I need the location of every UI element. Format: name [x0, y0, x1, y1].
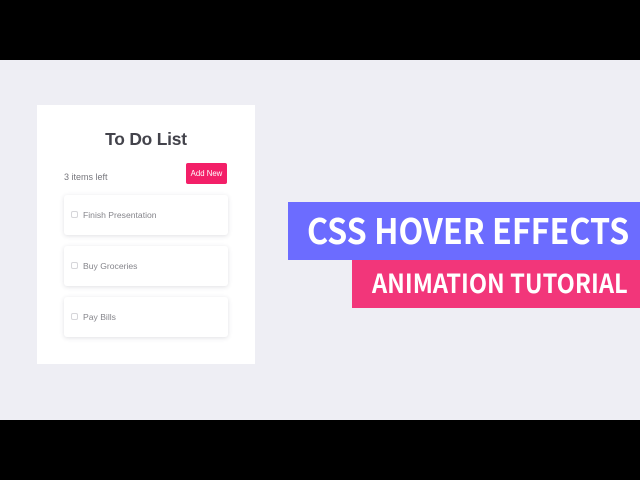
button: Add New: Add New [191, 169, 222, 178]
label: Pay Bills [83, 312, 116, 322]
label: Finish Presentation [83, 210, 157, 220]
banner: ANIMATION TUTORIAL [352, 260, 640, 308]
banner: CSS HOVER EFFECTS [288, 202, 640, 260]
text: items left: 3 items left [64, 172, 108, 182]
heading: To Do List: To Do List [105, 129, 187, 149]
panel: to do list card [37, 105, 255, 364]
banner subtitle text: ANIMATION TUTORIAL [372, 264, 628, 301]
label: Buy Groceries [83, 261, 137, 271]
list item: Finish Presentation [64, 195, 228, 235]
checkbox [71, 211, 78, 218]
banner title text: CSS HOVER EFFECTS [307, 204, 629, 255]
list item: Pay Bills [64, 297, 228, 337]
checkbox [71, 313, 78, 320]
checkbox [71, 262, 78, 269]
button: Add New [186, 163, 227, 184]
list item: Buy Groceries [64, 246, 228, 286]
background [0, 60, 640, 420]
